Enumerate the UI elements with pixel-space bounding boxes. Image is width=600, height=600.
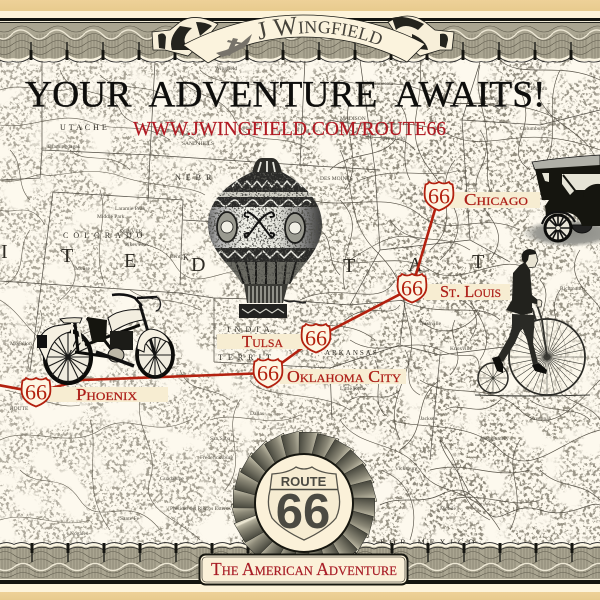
map: region names: NEBR xyxy=(175,173,216,182)
map: small place names: Shreveport xyxy=(330,456,355,462)
far wheel xyxy=(572,225,592,233)
balloon medallions xyxy=(217,212,305,243)
map: large country letters: T xyxy=(61,245,73,267)
bottom title plaque: The American Adventure xyxy=(211,559,397,579)
map: small place names: Nogales xyxy=(70,531,88,537)
rider head xyxy=(522,249,538,268)
map: region names: FOR MEXICO xyxy=(380,538,479,547)
rear wheel xyxy=(45,331,91,383)
map: small place names: Minnesota xyxy=(370,81,394,87)
map: large country letters: T xyxy=(472,251,484,273)
map: small place names: Nashville xyxy=(420,321,442,327)
map: small place names: MADISON xyxy=(340,116,366,122)
map: large country letters: I xyxy=(1,241,8,263)
bottom title plaque xyxy=(200,554,408,584)
map: small place names: Jackson xyxy=(420,416,438,422)
frame tubes xyxy=(75,318,140,357)
fuel tank xyxy=(108,310,143,332)
front wheel xyxy=(137,333,173,377)
map: large country letters: A xyxy=(408,254,423,276)
rider jacket xyxy=(506,262,540,315)
map: small place names: Mouse xyxy=(75,266,91,272)
stop: Phoenix xyxy=(22,378,168,406)
border frame top xyxy=(0,0,600,64)
map: small place names: Raleigh xyxy=(540,346,557,352)
ribbon main band xyxy=(183,15,425,63)
map: small place names: Savannah xyxy=(530,416,552,422)
rear mudguard xyxy=(38,323,75,362)
big wheel xyxy=(509,319,585,395)
seat xyxy=(60,318,82,323)
map: small place names: SAND HILLS xyxy=(182,141,214,147)
ribbon text xyxy=(200,33,400,64)
car front wheel xyxy=(545,215,571,241)
rosette badge xyxy=(231,430,377,576)
icon: motorcycle xyxy=(37,294,173,383)
balloon top cap xyxy=(252,158,282,173)
route 66 shield: 66 xyxy=(276,485,330,539)
map: region names: COLORADO xyxy=(63,231,147,240)
shield: 66 xyxy=(305,326,327,350)
car roof xyxy=(532,155,600,170)
map: state borders xyxy=(0,60,600,460)
balloon basket xyxy=(239,304,287,318)
label xyxy=(50,385,168,404)
shield xyxy=(254,359,282,388)
map: small place names: Little Rock xyxy=(340,386,365,392)
ribbon left scroll xyxy=(152,17,218,56)
title: YOUR ADVENTURE AWAITS! xyxy=(25,74,546,116)
map: small place names: Lansing xyxy=(480,96,498,102)
balloon body xyxy=(208,172,322,284)
balloon knot ornament xyxy=(245,212,274,238)
map: small place names: Knoxville xyxy=(450,346,473,352)
map: small place names: Bent xyxy=(170,254,181,260)
map: small place names: Pikes Peak xyxy=(125,242,149,248)
engine xyxy=(110,331,133,350)
small wheel xyxy=(478,363,508,393)
rider shoes xyxy=(492,356,547,374)
map: region names: K xyxy=(183,253,194,262)
shield: 66 xyxy=(257,360,279,386)
map: region names: UTACHE xyxy=(60,123,110,132)
map: small place names: Middle Park xyxy=(97,214,125,220)
shield xyxy=(22,378,50,406)
shield: 66 xyxy=(401,276,423,300)
shield: 66 xyxy=(428,184,450,208)
car fender xyxy=(542,212,575,224)
balloon neck xyxy=(244,284,288,303)
rider legs xyxy=(497,314,538,365)
route 66 shield: ROUTE xyxy=(281,474,327,489)
map: region names: TERRIT xyxy=(218,353,276,362)
car shadow xyxy=(522,219,600,247)
map: small place names: Mobile xyxy=(440,506,456,512)
icon: hot air balloon xyxy=(200,158,326,318)
map: small place names: Guadalupe xyxy=(160,476,184,482)
map: small place names: Bramingdagak xyxy=(48,144,81,150)
rosette centre disc xyxy=(255,454,353,552)
map: large country letters: E xyxy=(124,250,136,272)
balloon rope xyxy=(284,300,306,303)
map: small place names: Columbus xyxy=(520,126,543,132)
ribbon right scroll xyxy=(388,16,454,56)
front fork and mudguard xyxy=(140,305,155,355)
map: small place names xyxy=(10,65,583,537)
map: region names xyxy=(60,123,479,547)
label: Oklahoma City xyxy=(287,367,401,386)
map: small place names: Dallas xyxy=(250,411,264,417)
car seat tops xyxy=(583,184,600,198)
crankcase xyxy=(96,348,134,366)
stop: Chicago xyxy=(425,182,540,210)
map: small place names: Sante Fe xyxy=(120,516,140,522)
number plate xyxy=(37,335,47,348)
handlebars xyxy=(112,294,157,306)
shield: 66 xyxy=(25,380,47,404)
map: region names: ARKANSAS xyxy=(325,349,379,357)
stop: St. Louis xyxy=(398,274,510,302)
route line xyxy=(0,196,439,392)
banner ribbon: J Wingfield xyxy=(152,14,454,64)
map: large country letters: D xyxy=(191,254,205,276)
label: Chicago xyxy=(464,190,528,209)
label: St. Louis xyxy=(440,282,501,301)
map: small place names: Los Esteros xyxy=(205,506,231,512)
map: coast and lower rivers xyxy=(250,440,600,520)
map: small place names: Vicksburg xyxy=(395,466,418,472)
map: region names: INDIA xyxy=(227,325,275,334)
label: Tulsa xyxy=(242,332,283,351)
border frame bottom xyxy=(0,540,600,600)
biplane icon xyxy=(216,34,252,57)
map: small place names: Presidio del Rio xyxy=(170,506,206,512)
banner ribbon: J Wingfield: J Wingfield xyxy=(258,16,382,44)
rider hand xyxy=(537,300,542,307)
handlebar and fork xyxy=(532,305,547,357)
car body xyxy=(535,165,600,226)
icon: penny farthing rider xyxy=(475,249,590,396)
map: small place names: Montgomery xyxy=(480,436,509,442)
map: small place names: DES MOINES xyxy=(320,176,353,182)
rosette pleats xyxy=(231,430,377,576)
website url: WWW.JWINGFIELD.COM/ROUTE66 xyxy=(133,118,446,140)
map: small place names: Toronto xyxy=(530,86,548,92)
map: rivers and roads east xyxy=(300,60,600,540)
car window strut xyxy=(563,175,577,193)
map: rivers and roads west xyxy=(0,70,350,540)
route 66 shield xyxy=(268,467,340,540)
map: small place names: San Saba xyxy=(210,436,231,442)
map: small place names: DENVER xyxy=(120,229,143,235)
car windows xyxy=(542,173,600,195)
ground line xyxy=(475,395,590,396)
map: small place names: Laramie Peak xyxy=(115,206,146,212)
map: small place names: ROUTE xyxy=(10,406,29,412)
map: large country letters: T xyxy=(343,255,355,277)
stop: Tulsa xyxy=(217,324,330,352)
map: large country letters xyxy=(1,241,484,277)
map: small place names: Mogollon xyxy=(10,341,32,347)
label: Phoenix xyxy=(76,385,137,404)
stop: Oklahoma City xyxy=(254,359,406,388)
map: small place names: Springfield xyxy=(380,135,405,142)
icon: vintage car xyxy=(522,155,600,247)
battery block xyxy=(87,317,107,342)
map: small place names: Richmond xyxy=(560,286,583,292)
map: small place names: Wingfield xyxy=(215,65,237,72)
map: small place names: Fredericksburg xyxy=(200,455,233,461)
